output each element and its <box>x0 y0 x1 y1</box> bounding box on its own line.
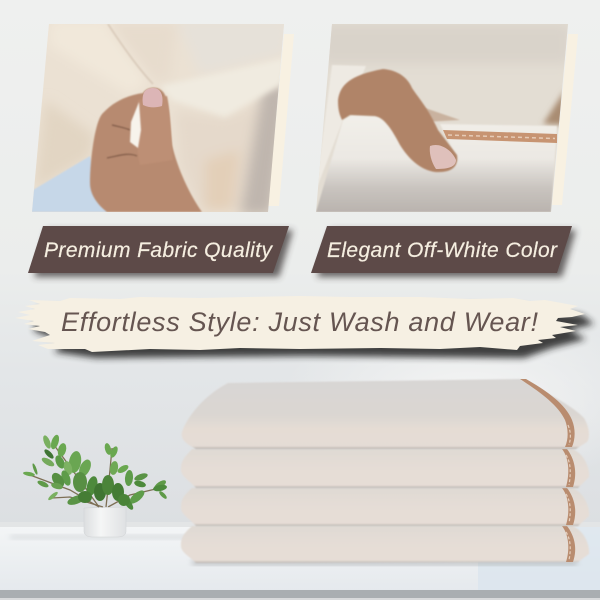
leaves <box>23 434 168 511</box>
second fold <box>181 449 589 488</box>
thumbnail <box>143 88 163 107</box>
plant <box>23 434 168 537</box>
left photo backing <box>268 34 294 206</box>
label: elegant off-white color <box>311 226 576 277</box>
photo: hand holding fabric edge <box>315 24 571 212</box>
label: premium fabric quality <box>28 226 293 277</box>
top fold <box>182 379 589 449</box>
hand <box>90 88 202 212</box>
right photo backing <box>552 34 578 205</box>
white fabric <box>316 115 557 212</box>
third fold <box>181 488 589 526</box>
pinched fabric <box>130 102 141 148</box>
fabric stack <box>181 379 589 565</box>
label: elegant off-white color: Elegant Off-White Color <box>327 239 558 262</box>
selvedge tape <box>443 130 557 143</box>
pot <box>84 507 126 537</box>
stack shadow <box>192 560 577 565</box>
photo: hand pinching fabric <box>30 20 290 215</box>
brush banner <box>15 296 594 358</box>
bottom fold <box>181 526 589 563</box>
hand <box>338 69 457 172</box>
stems <box>30 445 160 507</box>
label: premium fabric quality: Premium Fabric Quality <box>44 239 274 262</box>
banner text: Effortless Style: Just Wash and Wear! <box>61 307 538 337</box>
table top <box>0 522 600 600</box>
